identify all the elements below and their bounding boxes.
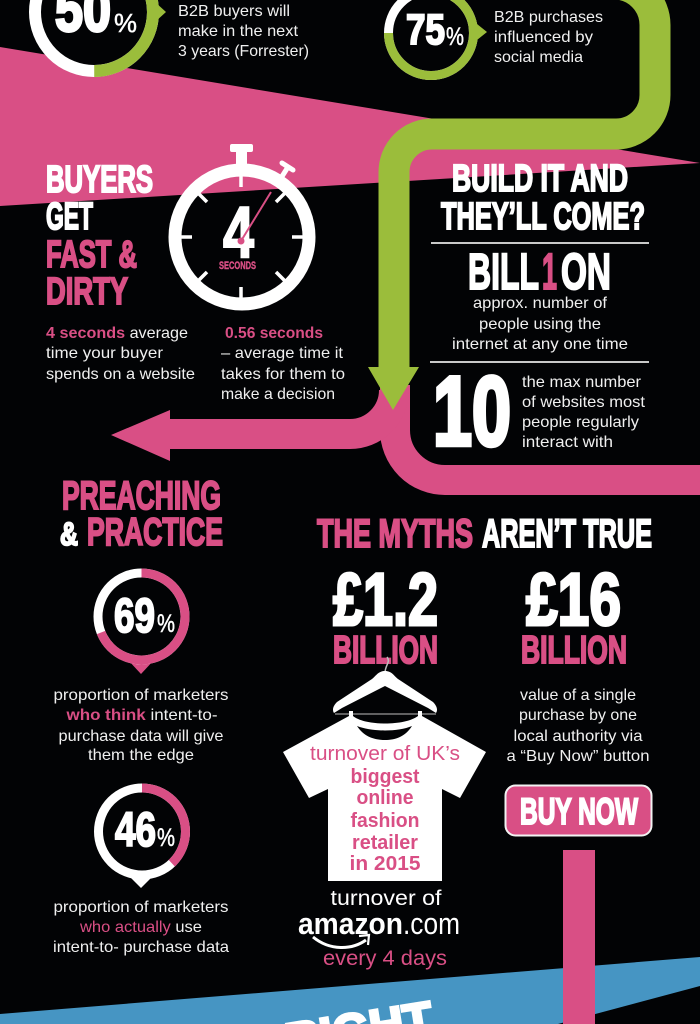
stat: 75 percent ring: [388, 0, 487, 76]
text: who think: them the edge: [88, 747, 194, 764]
heading: build it and they'll come: [441, 158, 645, 238]
text: 75 percent description: social media: [494, 49, 583, 66]
text: 4 seconds average: time your buyer: [46, 345, 164, 362]
text: who actually use: who actually use: [79, 919, 202, 936]
text: buy now description: value of a single: [520, 687, 636, 704]
stat: 1.2 billion: BILLION: [333, 629, 438, 672]
text: buy now description: a “Buy Now” button: [506, 748, 650, 765]
heading: preaching and practice: &: [60, 516, 78, 552]
heading: the myths aren't true: THE MYTHS: [317, 512, 473, 556]
text: 50 percent description: make in the next: [178, 23, 299, 40]
stat: 1.2 billion: £1.2: [333, 558, 438, 641]
icon: t-shirt with text: in 2015: [350, 853, 420, 875]
heading: buyers get fast and dirty: BUYERS: [46, 159, 153, 201]
stat: 75 percent ring: 75: [406, 6, 445, 54]
stat: 46 percent ring: %: [157, 824, 175, 852]
stat: 50 percent ring: %: [114, 8, 137, 38]
text: buy now description: purchase by one: [519, 707, 637, 724]
text: websites description: [522, 374, 646, 451]
text: who think: who think intent-to-: [65, 707, 218, 724]
stat: 1.2 billion: [333, 558, 438, 672]
heading: preaching and practice: PREACHING: [62, 474, 221, 518]
text: 0.56 seconds decision: takes for them to: [221, 366, 345, 383]
text: every 4 days: every 4 days: [323, 947, 447, 970]
icon: stopwatch: 4: [223, 193, 254, 273]
green arrow head: [368, 367, 419, 410]
stat: 10 websites: 10: [433, 356, 511, 466]
text: buy now description: local authority via: [514, 728, 643, 745]
stat: 69 percent ring: [98, 573, 185, 674]
text: billion description: [452, 295, 628, 353]
stat: 46 percent ring: 46: [115, 804, 156, 857]
text: who think: proportion of marketers: [54, 687, 228, 704]
text: 0.56 seconds decision: [221, 325, 345, 403]
pink flow path with left arrow: [111, 385, 700, 480]
icon: stopwatch: SECONDS: [219, 260, 256, 272]
text: who actually use: proportion of marketers: [54, 899, 228, 916]
stat: 69 percent ring: 69: [114, 590, 155, 643]
logo: amazon.com: [298, 906, 460, 948]
text: buy now description: [506, 687, 650, 765]
text: 75 percent description: influenced by: [494, 29, 593, 46]
icon: t-shirt with text: retailer: [352, 832, 418, 854]
logo: amazon.com: .com: [403, 906, 460, 941]
text: who actually use: intent-to- purchase data: [53, 939, 229, 956]
button: buy now: BUY NOW: [520, 791, 638, 832]
text: 0.56 seconds decision: – average time it: [221, 345, 344, 362]
stat: 46 percent ring: [98, 788, 186, 888]
text: billion description: internet at any one time: [452, 336, 628, 353]
text: billion description: people using the: [479, 316, 601, 333]
pink background wedge: [0, 47, 700, 206]
stat: 1 billion: 1: [542, 243, 557, 300]
text: websites description: interact with: [522, 434, 613, 451]
text: turnover of: turnover of: [330, 887, 442, 910]
stat: 1 billion: BILL: [468, 243, 539, 300]
text: 50 percent description: 3 years (Forrester): [178, 43, 309, 60]
icon: t-shirt with text: turnover of UK’s: [310, 743, 460, 765]
stat: 75 percent ring: %: [446, 23, 464, 51]
stat: 16 billion: [521, 558, 627, 672]
green flow arrow: [394, 0, 655, 370]
stat: 16 billion: BILLION: [521, 629, 627, 672]
heading: preaching and practice: PRACTICE: [87, 511, 223, 554]
icon: t-shirt with text: fashion: [350, 810, 420, 832]
text: websites description: of websites most: [522, 394, 646, 411]
heading: buyers get fast and dirty: DIRTY: [46, 271, 128, 313]
text: who think: [54, 687, 228, 764]
icon: t-shirt with text: [283, 711, 486, 881]
text: 0.56 seconds decision: 0.56 seconds: [225, 325, 323, 342]
heading: preaching and practice: [60, 474, 223, 554]
icon: t-shirt with text: biggest: [350, 766, 420, 788]
text: billion description: approx. number of: [473, 295, 608, 312]
text: who think: purchase data will give: [58, 728, 224, 745]
text: 0.56 seconds decision: make a decision: [221, 386, 335, 403]
icon: stopwatch: [175, 144, 309, 304]
text: 75 percent description: B2B purchases: [494, 9, 603, 26]
stat: 1 billion: ON: [561, 243, 611, 300]
stat: 69 percent ring: %: [157, 610, 175, 638]
stat: 16 billion: £16: [526, 558, 621, 641]
heading: build it and they'll come: BUILD IT AND: [452, 158, 628, 200]
text: 75 percent description: [494, 9, 603, 66]
text: websites description: people regularly: [522, 414, 639, 431]
blue background wedge: [0, 957, 700, 1024]
heading: the myths aren't true: [317, 512, 652, 556]
button: buy now: [506, 786, 652, 836]
icon: hanger: [333, 657, 437, 714]
text: 4 seconds average: spends on a website: [46, 366, 195, 383]
heading: buyers get fast and dirty: GET: [46, 196, 93, 238]
text: 4 seconds average: 4 seconds average: [46, 325, 188, 342]
text: websites description: the max number: [522, 374, 642, 391]
stat: 50 percent ring: [35, 0, 166, 71]
heading: buyers get fast and dirty: [46, 159, 153, 313]
heading: buyers get fast and dirty: FAST &: [46, 234, 137, 276]
logo: amazon.com: amazon: [298, 906, 403, 941]
text: 4 seconds average: [46, 325, 195, 383]
text: who actually use: [53, 899, 229, 956]
icon: t-shirt with text: online: [356, 787, 414, 809]
text: 50 percent description: [178, 3, 309, 60]
text: 50 percent description: B2B buyers will: [178, 3, 290, 20]
pink connector stem: [563, 850, 595, 1024]
